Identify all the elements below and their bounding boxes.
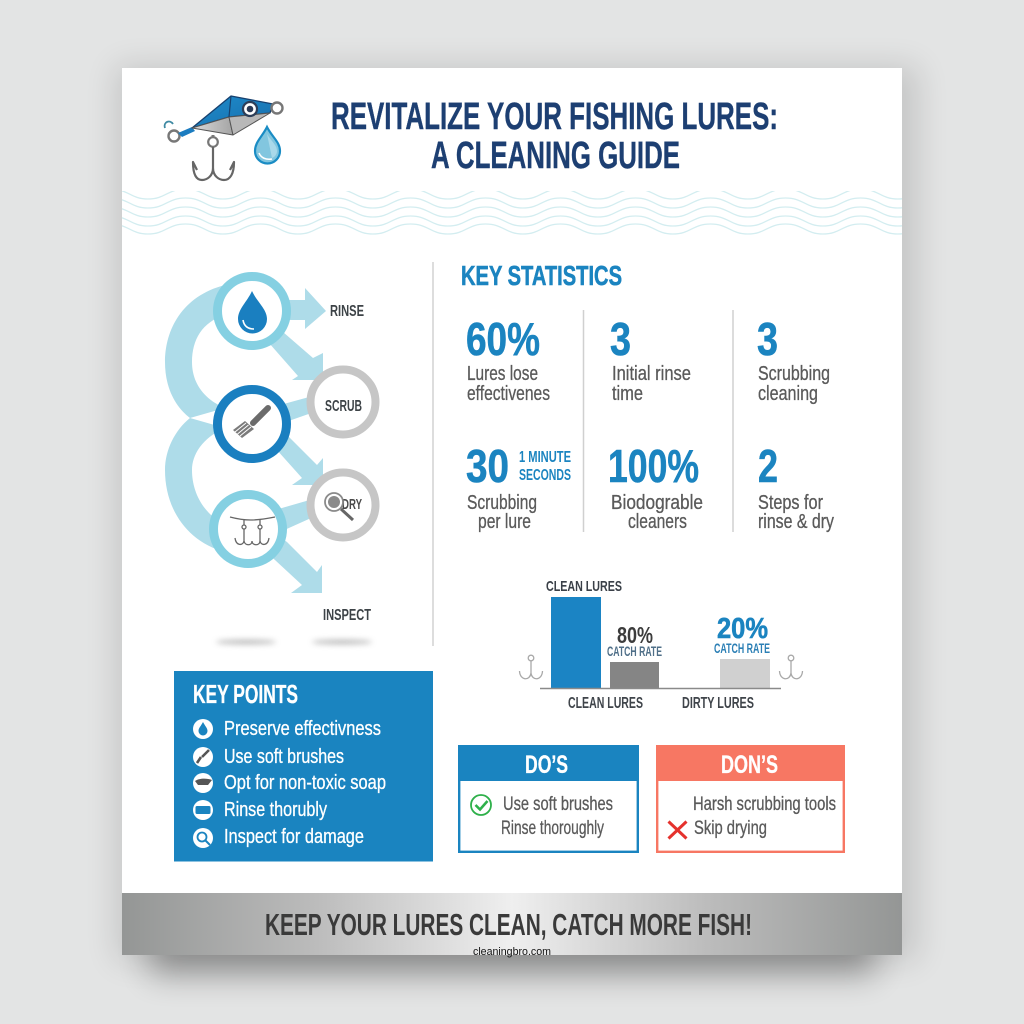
bar: 20% catch rate <box>720 659 770 688</box>
stat: 30 seconds <box>466 440 571 533</box>
poster card <box>122 68 902 955</box>
item: preserve: Preserve effectivness <box>224 718 381 740</box>
website: cleaningbro.com <box>473 946 551 958</box>
stat: 30 seconds: Scrubbing <box>467 492 537 514</box>
panel: do's: Rinse thoroughly <box>501 818 604 839</box>
stat: 100% <box>608 440 703 533</box>
chart labels: CATCH RATE <box>714 641 770 656</box>
footer banner <box>122 893 902 958</box>
bar: 80% catch rate <box>610 662 659 688</box>
stat: 30 seconds: SECONDS <box>519 467 571 484</box>
stat: 2 steps: Steps for <box>758 492 823 514</box>
stat: 100%: Biodograble <box>611 492 703 514</box>
panel: key points <box>174 671 433 862</box>
chart labels: DIRTY LURES <box>682 695 754 712</box>
stat: 30 seconds: per lure <box>478 511 531 533</box>
item: soap: Opt for non-toxic soap <box>224 772 386 794</box>
title <box>331 96 778 177</box>
stat: scrubbing cleaning: Scrubbing <box>758 363 830 385</box>
item: brushes <box>193 746 344 768</box>
call to action: KEEP YOUR LURES CLEAN, CATCH MORE FISH! <box>265 907 752 942</box>
icon: fishing lure with water drop <box>165 96 282 180</box>
heading: KEY POINTS <box>193 679 298 709</box>
panel: don's: Skip drying <box>694 818 767 839</box>
stat: 100%: cleaners <box>628 511 687 533</box>
chart labels: CLEAN LURES <box>546 578 622 595</box>
heading: DO’S <box>525 751 568 779</box>
crescent arrows linking steps <box>165 285 326 593</box>
stat: scrubbing cleaning: cleaning <box>758 383 818 405</box>
stat: scrubbing cleaning: 3 <box>757 313 778 365</box>
step circle: rinse <box>218 276 286 346</box>
stat: 30 seconds: 30 <box>466 440 509 492</box>
bar: clean lures <box>551 597 601 688</box>
chart labels: CLEAN LURES <box>568 695 643 712</box>
stat: initial rinse: time <box>612 383 643 405</box>
stat: 2 steps: rinse & dry <box>758 511 834 533</box>
chart labels: 20% <box>717 613 768 645</box>
chart labels <box>546 578 770 712</box>
panel: don's <box>656 745 845 852</box>
label: inspect: INSPECT <box>323 607 371 624</box>
stat: 60%: Lures lose <box>467 363 538 385</box>
stat: scrubbing cleaning <box>757 313 830 405</box>
stat: 60%: effectivenes <box>467 383 550 405</box>
label: rinse: RINSE <box>330 303 364 320</box>
panel: don's: Harsh scrubbing tools <box>693 794 836 815</box>
chart labels: 80% <box>617 622 653 648</box>
panel: key statistics <box>461 260 834 533</box>
label circle: scrub: SCRUB <box>325 398 362 415</box>
stat: 2 steps: 2 <box>758 440 778 492</box>
heading: DON’S <box>721 751 778 779</box>
item: inspect <box>193 826 364 848</box>
stat: 2 steps <box>758 440 834 533</box>
icon: red cross <box>668 822 686 838</box>
bar chart: catch rate <box>520 578 802 712</box>
label circle: dry with magnifier: DRY <box>342 496 362 513</box>
item: brushes: Use soft brushes <box>224 746 344 768</box>
step circle: dry <box>214 494 282 564</box>
panel: do's <box>458 745 639 852</box>
stat: 30 seconds: 1 MINUTE <box>519 449 571 466</box>
chart labels: CATCH RATE <box>607 644 662 659</box>
stat: 60% <box>466 313 550 405</box>
title: A CLEANING GUIDE <box>431 135 680 177</box>
label circle: dry with magnifier <box>310 472 376 538</box>
ground shadows <box>216 640 372 644</box>
stat: 100%: 100% <box>608 440 699 492</box>
stat: initial rinse: Initial rinse <box>612 363 691 385</box>
icon: check mark <box>471 795 491 815</box>
panel: do's: Use soft brushes <box>503 794 613 815</box>
icon: left hook <box>520 655 542 679</box>
icon: right hook <box>780 655 802 679</box>
panel: process flow diagram <box>165 276 376 644</box>
item: rinse <box>193 799 327 821</box>
title: REVITALIZE YOUR FISHING LURES: <box>331 96 778 138</box>
stat: 60%: 60% <box>466 313 540 365</box>
stat: initial rinse <box>610 313 691 405</box>
item: inspect: Inspect for damage <box>224 826 364 848</box>
label circle: scrub <box>310 370 376 434</box>
step circle: scrub <box>218 390 286 458</box>
heading: KEY STATISTICS <box>461 260 622 291</box>
stat: initial rinse: 3 <box>610 313 631 365</box>
item: rinse: Rinse thorubly <box>224 799 327 821</box>
